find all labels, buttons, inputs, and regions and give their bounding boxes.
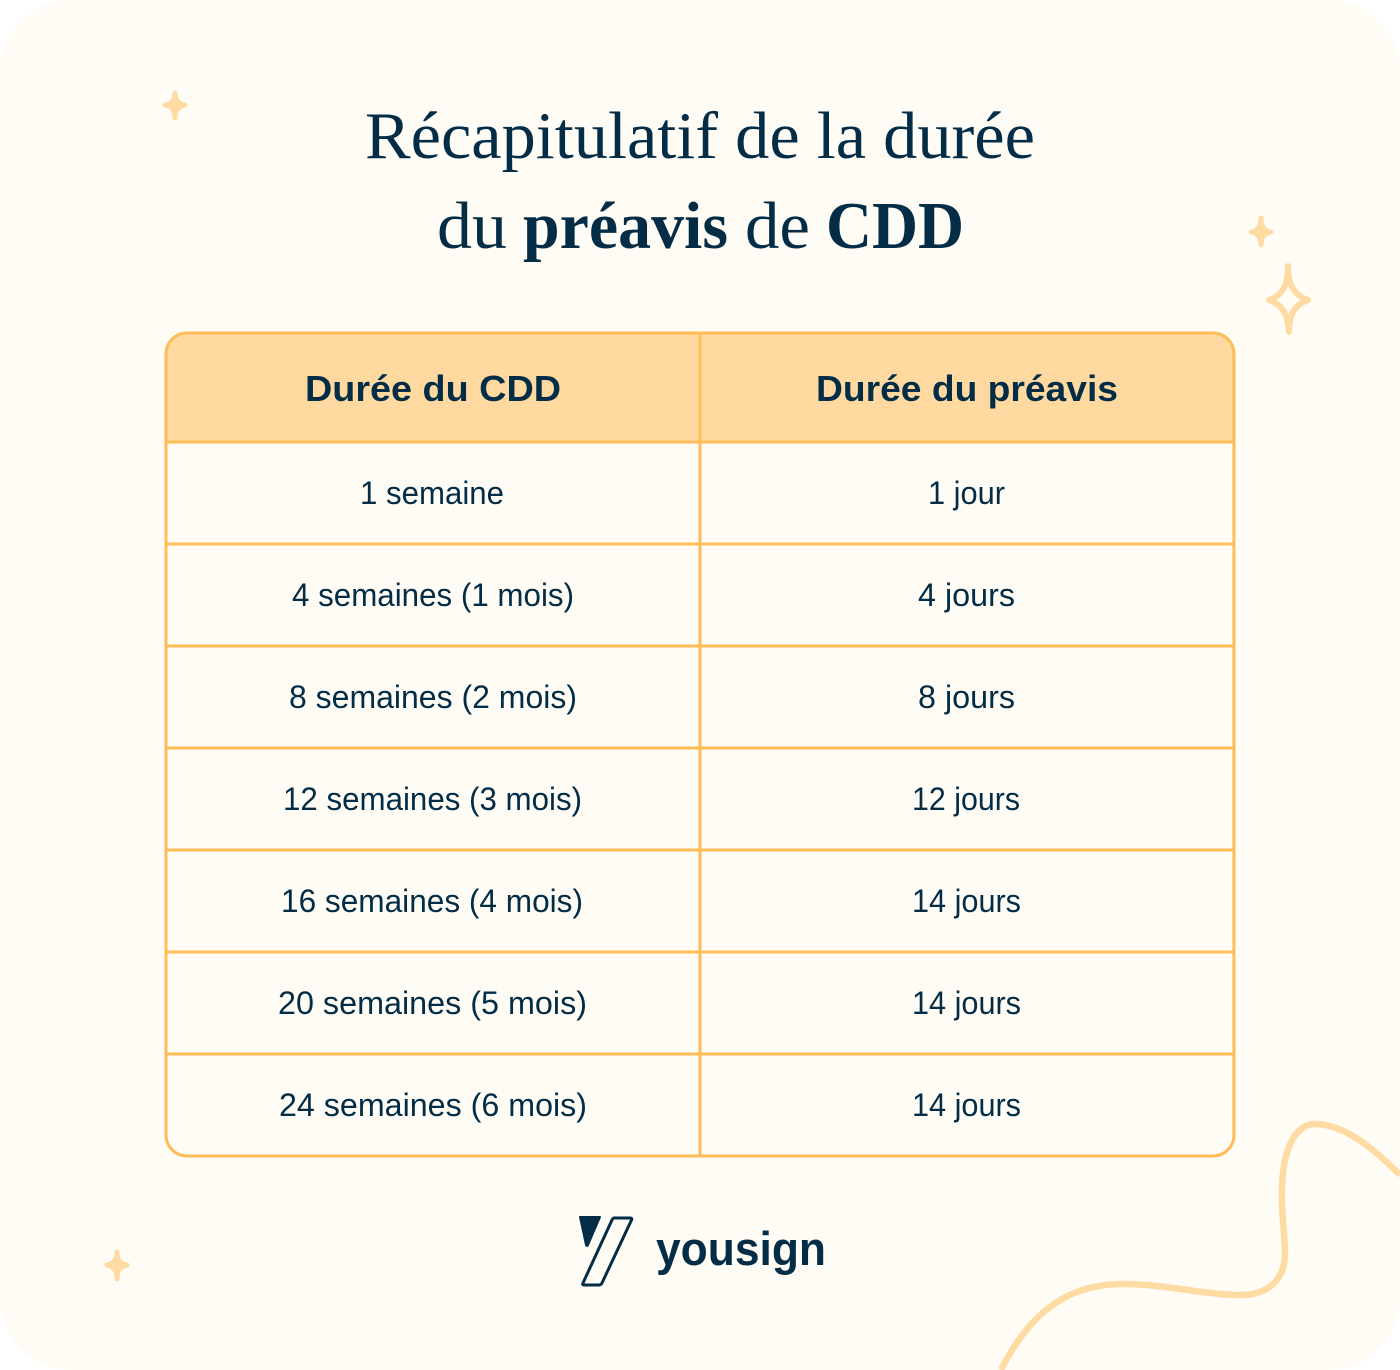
row: 1 semaine: 1 jour [928,475,1005,511]
title: préavis [523,189,728,263]
title: de [745,189,810,263]
row: 4 semaines: 4 semaines (1 mois) [292,577,574,613]
title: Récapitulatif de la durée [365,99,1035,173]
row: 4 semaines: 4 jours [918,577,1015,613]
row: 12 semaines [283,781,1020,817]
row: 16 semaines: 16 semaines (4 mois) [281,883,583,919]
row: 24 semaines [279,1087,1021,1123]
logo: yousign [580,1217,826,1285]
title: CDD [826,189,964,263]
icon: yousign mark [580,1217,632,1285]
wordmark: yousign [656,1222,826,1275]
column headers [305,368,1118,409]
table [166,333,1234,1156]
row: 16 semaines [281,883,1021,919]
row: 1 semaine [360,475,1005,511]
row: 8 semaines: 8 jours [918,679,1015,715]
row: 12 semaines: 12 semaines (3 mois) [283,781,582,817]
row: 12 semaines: 12 jours [912,781,1020,817]
table grid [166,333,1234,1156]
row: 20 semaines: 14 jours [912,985,1021,1021]
table header background [166,333,1234,442]
title: du [437,189,507,263]
icon: small sparkle top left [165,93,185,118]
icon: small sparkle bottom left [107,1252,127,1279]
row: 24 semaines: 24 semaines (6 mois) [279,1087,587,1123]
title [365,99,1035,263]
row: 16 semaines: 14 jours [912,883,1021,919]
row: 1 semaine: 1 semaine [360,475,504,511]
row: 8 semaines [289,679,1015,715]
icon: large sparkle outline [1269,266,1308,332]
row: 4 semaines [292,577,1015,613]
column headers: Durée du préavis [816,368,1118,409]
row: 24 semaines: 14 jours [912,1087,1021,1123]
column headers: Durée du CDD [305,368,561,409]
decorative curve [1001,1124,1400,1370]
row: 20 semaines: 20 semaines (5 mois) [278,985,587,1021]
icon: small sparkle top right [1251,218,1271,245]
row: 20 semaines [278,985,1021,1021]
row: 8 semaines: 8 semaines (2 mois) [289,679,577,715]
